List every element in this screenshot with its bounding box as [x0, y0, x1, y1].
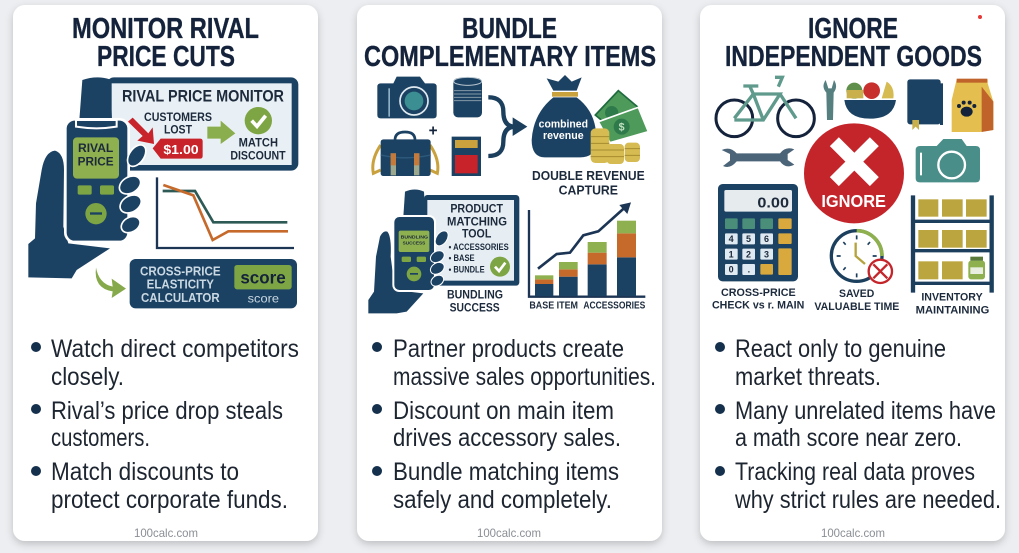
stacked bar chart [529, 202, 646, 312]
inventory label: MAINTAINING [916, 304, 990, 316]
icon: coins [591, 128, 640, 164]
bullet list: customers. [51, 424, 150, 452]
icon: camera [377, 77, 437, 118]
double revenue capture label [532, 168, 645, 197]
footer: 100calc.com [821, 526, 885, 540]
bullet list: Watch direct competitors [51, 335, 299, 363]
inventory label [916, 291, 990, 316]
calculator label: CHECK vs r. MAIN [712, 300, 804, 312]
panel: bundle complementary items [357, 5, 662, 541]
double revenue capture label: DOUBLE REVENUE [532, 168, 645, 183]
icon: cash: $ [619, 122, 625, 134]
bullet list: protect corporate funds. [51, 486, 288, 514]
plus sign: + [429, 123, 438, 140]
product matching tool panel: TOOL [462, 228, 491, 241]
icon: money bag: revenue [543, 130, 584, 142]
bullet list: a math score near zero. [735, 424, 962, 452]
bundling success label [447, 287, 503, 314]
bullet list: React only to genuine [735, 335, 946, 363]
icon: calculator: 6 [764, 234, 769, 244]
icon: calculator [718, 184, 798, 281]
heading: monitor rival price cuts [72, 13, 259, 73]
product matching tool panel: • ACCESSORIES [449, 242, 509, 252]
bullet list: Rival’s price drop steals [51, 397, 283, 425]
bundling success label: BUNDLING [447, 287, 503, 301]
cross-price elasticity calculator: ELASTICITY [147, 278, 214, 292]
monitor panel: MATCH [239, 136, 278, 150]
icon: pet food bag [952, 79, 993, 132]
bullet list: Partner products create [393, 335, 624, 363]
icon: lens [453, 77, 482, 117]
cross-price elasticity calculator: CALCULATOR [141, 291, 220, 305]
icon: bicycle [716, 77, 814, 137]
icon: small wrench [823, 80, 836, 120]
icon: teal camera [916, 139, 980, 182]
monitor panel [107, 77, 298, 171]
cross-price elasticity calculator: score [240, 267, 286, 287]
icon: money bag [532, 75, 596, 157]
footer: 100calc.com [134, 526, 198, 540]
saved time label: VALUABLE TIME [814, 301, 900, 313]
hand holding device: BUNDLING [401, 235, 428, 241]
product matching tool panel [424, 195, 519, 286]
arrow: merge [488, 97, 515, 156]
icon: calculator: 5 [746, 234, 751, 244]
monitor panel: DISCOUNT [230, 148, 286, 162]
hand holding device: RIVAL [78, 141, 114, 155]
heading: bundle complementary items: BUNDLE [462, 13, 557, 45]
product matching tool panel: PRODUCT [450, 203, 503, 216]
hand holding device: PRICE [78, 154, 114, 168]
illustration: ignore [712, 77, 993, 316]
footer: 100calc.com [477, 526, 541, 540]
heading: monitor rival price cuts: MONITOR RIVAL [72, 13, 259, 45]
monitor panel: CUSTOMERS [144, 110, 212, 124]
hand holding device: SUCCESS [403, 241, 426, 247]
icon: calculator: 3 [764, 249, 769, 259]
heading: ignore independent goods: IGNORE [808, 13, 898, 45]
calculator label [712, 287, 804, 312]
line chart [157, 177, 294, 248]
product matching tool panel: MATCHING [447, 215, 507, 228]
heading: bundle complementary items [364, 13, 656, 73]
icon: calculator: 0 [729, 265, 734, 275]
bullet list [31, 335, 299, 514]
bundling success label: SUCCESS [450, 300, 500, 314]
icon: wrench [722, 148, 794, 167]
icon: ignore badge: IGNORE [821, 191, 886, 211]
icon: calculator: 2 [746, 249, 751, 259]
monitor panel: $1.00 [163, 142, 199, 157]
illustration: bundling [368, 75, 648, 314]
panel: monitor rival price cuts [13, 5, 318, 541]
heading: monitor rival price cuts: PRICE CUTS [97, 41, 235, 73]
icon: calculator: 4 [729, 234, 734, 244]
icon: calculator: 0.00 [757, 195, 789, 211]
bullet list: Bundle matching items [393, 458, 619, 486]
heading: ignore independent goods [725, 13, 982, 73]
icon: shelves [913, 195, 992, 293]
icon: book [907, 79, 943, 130]
product matching tool panel: • BASE [449, 253, 475, 263]
bullet list: Match discounts to [51, 458, 239, 486]
icon: memory card [452, 137, 481, 176]
bullet list: drives accessory sales. [393, 424, 621, 452]
icon: calculator: 1 [729, 249, 734, 259]
product matching tool panel: • BUNDLE [449, 264, 485, 274]
bullet list: safely and completely. [393, 486, 612, 514]
stacked bar chart: BASE ITEM [529, 301, 578, 312]
saved time label [814, 288, 900, 313]
cross-price elasticity calculator [130, 259, 297, 308]
icon: bag [373, 132, 438, 176]
panel: ignore independent goods [700, 5, 1005, 541]
cross-price elasticity calculator: score [248, 291, 279, 305]
arrow: green curved [96, 267, 126, 298]
bullet list: massive sales opportunities. [393, 363, 656, 391]
heading: bundle complementary items: COMPLEMENTARY ITEMS [364, 41, 656, 73]
icon: calculator: . [748, 265, 750, 275]
monitor panel: RIVAL PRICE MONITOR [122, 86, 284, 105]
cross-price elasticity calculator: CROSS-PRICE [140, 265, 221, 279]
illustration: rival price monitor [28, 77, 298, 308]
icon: fruit bowl [844, 82, 896, 119]
saved time label: SAVED [839, 288, 874, 300]
bullet list [715, 335, 1001, 514]
icon: ignore badge [804, 123, 904, 223]
bullet list [372, 335, 656, 514]
monitor panel: LOST [164, 122, 193, 136]
calculator label: CROSS-PRICE [721, 287, 796, 299]
icon: cash [595, 91, 648, 143]
icon: clock [831, 231, 892, 283]
hand holding device [368, 189, 451, 313]
bullet list: Discount on main item [393, 397, 614, 425]
inventory label: INVENTORY [921, 291, 983, 303]
bullet list: market threats. [735, 363, 881, 391]
bullet list: Tracking real data proves [735, 458, 975, 486]
bullet list: closely. [51, 363, 124, 391]
hand holding device [28, 77, 150, 278]
stacked bar chart: ACCESSORIES [583, 301, 646, 312]
double revenue capture label: CAPTURE [559, 182, 618, 197]
icon: money bag: combined [539, 118, 588, 130]
